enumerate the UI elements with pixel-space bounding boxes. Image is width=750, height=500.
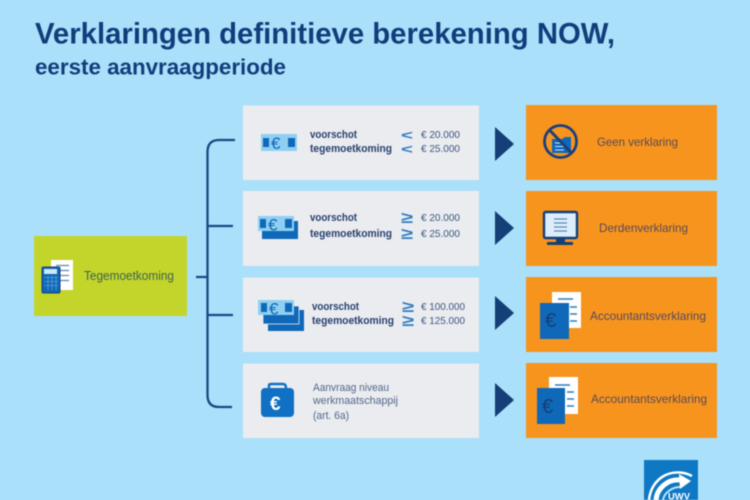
- condition text: [312, 299, 465, 330]
- icon: euro document: [537, 377, 578, 424]
- panel: tegemoetkoming: [34, 236, 187, 316]
- icon: euro document: €: [545, 310, 556, 332]
- logo: UWV: [644, 460, 698, 500]
- condition text: voorschot: [310, 129, 357, 141]
- label: accountantsverklaring: Accountantsverklaring: [591, 392, 707, 406]
- application text: Aanvraag niveau: [313, 382, 389, 394]
- label: geen verklaring: Geen verklaring: [597, 135, 678, 149]
- condition text: voorschot: [312, 301, 359, 313]
- label: tegemoetkoming: Tegemoetkoming: [84, 269, 174, 283]
- panel: row 2 condition: [243, 191, 479, 266]
- condition text: [310, 128, 460, 156]
- condition text: ≥: [402, 313, 414, 330]
- icon: stack of banknotes: €: [269, 300, 279, 318]
- panel: geen verklaring: [526, 105, 717, 180]
- icon: briefcase with euro: €: [270, 394, 281, 415]
- panel: derdenverklaring: [526, 191, 717, 266]
- icon: briefcase with euro: [261, 384, 294, 417]
- arrow: row 2: [495, 211, 514, 245]
- arrow: row 4: [495, 383, 514, 417]
- condition text: tegemoetkoming: [312, 315, 394, 327]
- condition text: ≥: [402, 299, 414, 316]
- condition text: € 20.000: [421, 129, 460, 141]
- application text: [312, 382, 398, 422]
- panel: accountantsverklaring 1: [526, 277, 717, 352]
- condition text: ≥: [401, 210, 413, 227]
- icon: stack of banknotes: [258, 300, 304, 331]
- condition text: ≥: [401, 226, 413, 243]
- condition text: € 20.000: [421, 212, 460, 224]
- condition text: [310, 210, 460, 243]
- condition text: voorschot: [310, 212, 357, 224]
- application text: werkmaatschappij: [312, 395, 398, 407]
- label: accountantsverklaring: Accountantsverklaring: [590, 309, 706, 323]
- arrow: row 1: [495, 127, 514, 161]
- panel: accountantsverklaring 2: [526, 363, 717, 438]
- icon: calculator and document: [42, 260, 73, 293]
- condition text: € 25.000: [421, 228, 460, 240]
- condition text: € 100.000: [421, 301, 465, 313]
- title: Verklaringen definitieve berekening NOW,: [35, 18, 615, 50]
- condition text: <: [401, 128, 414, 142]
- condition text: € 125.000: [421, 315, 465, 327]
- icon: euro document: [540, 292, 581, 339]
- title: [35, 18, 615, 80]
- panel: row 3 condition: [243, 278, 479, 352]
- icon: two banknotes: €: [268, 216, 278, 234]
- icon: euro document: €: [542, 396, 553, 418]
- condition text: tegemoetkoming: [310, 143, 392, 155]
- icon: single banknote: €: [271, 134, 281, 153]
- application text: (art. 6a): [313, 410, 349, 422]
- icon: crossed-out document: [544, 126, 576, 158]
- bracket connector: [196, 140, 235, 407]
- condition text: <: [401, 142, 414, 156]
- icon: two banknotes: [258, 216, 298, 239]
- subtitle: eerste aanvraagperiode: [35, 54, 286, 80]
- icon: monitor: [544, 212, 577, 245]
- condition text: tegemoetkoming: [310, 228, 392, 240]
- panel: row 1 condition: [243, 106, 479, 180]
- condition text: € 25.000: [421, 143, 460, 155]
- panel: row 4 condition: [243, 364, 479, 438]
- icon: single banknote: [261, 134, 297, 153]
- label: derdenverklaring: Derdenverklaring: [599, 221, 688, 235]
- arrow: row 3: [495, 296, 514, 330]
